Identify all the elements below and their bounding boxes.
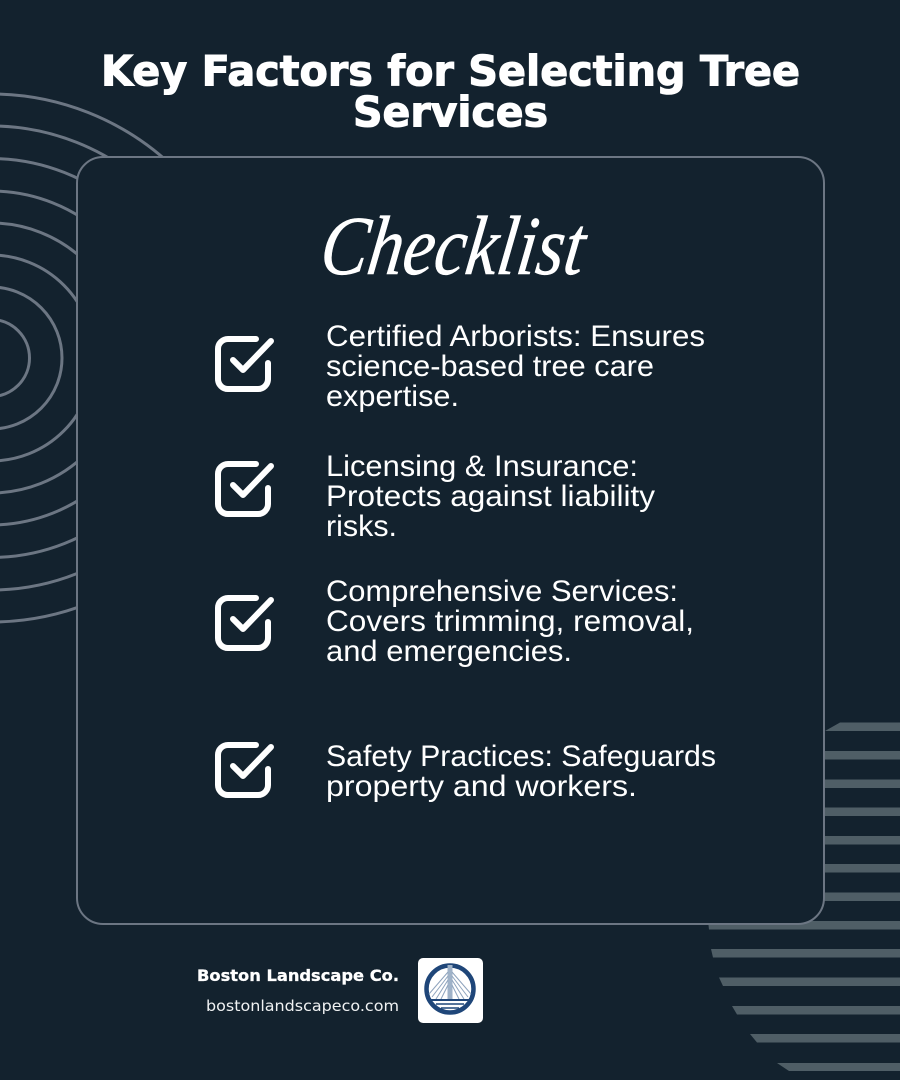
title xyxy=(101,46,800,136)
text: safety practices: property and workers. xyxy=(326,770,637,803)
text: certified arborists: expertise. xyxy=(326,380,459,413)
icon: checkbox xyxy=(218,745,271,795)
text: licensing and insurance: risks. xyxy=(326,510,397,543)
footer: company name and url xyxy=(197,966,399,1015)
panel: checklist xyxy=(77,157,824,924)
decorative concentric arcs xyxy=(0,94,255,622)
footer: company name and url: bostonlandscapeco.com xyxy=(206,997,399,1015)
text: certified arborists xyxy=(326,320,705,413)
decorative striped semicircle xyxy=(708,722,900,1071)
text: comprehensive services: Covers trimming, removal, xyxy=(326,605,694,638)
text: comprehensive services: Comprehensive Services: xyxy=(326,575,678,608)
heading: Checklist: Checklist xyxy=(315,200,593,293)
text: safety practices: Safety Practices: Safeguards xyxy=(326,740,716,773)
icon: company logo xyxy=(418,958,483,1023)
checklist item: safety practices xyxy=(218,740,716,803)
icon: checkbox xyxy=(218,464,271,514)
icon: checkbox xyxy=(218,339,271,389)
text: certified arborists: science-based tree care xyxy=(326,350,654,383)
footer: company name and url: Boston Landscape Co. xyxy=(197,966,399,985)
title: Key Factors for Selecting Tree xyxy=(101,46,800,96)
text: safety practices xyxy=(326,740,716,803)
icon: checkbox xyxy=(218,598,271,648)
checklist item: licensing and insurance xyxy=(218,450,655,543)
checklist item: certified arborists xyxy=(218,320,705,413)
text: certified arborists: Certified Arborists: Ensures xyxy=(326,320,705,353)
text: licensing and insurance: Licensing & Insurance: xyxy=(326,450,638,483)
text: licensing and insurance: Protects against liability xyxy=(326,480,655,513)
text: comprehensive services xyxy=(326,575,694,668)
title: Services xyxy=(353,88,548,136)
text: licensing and insurance xyxy=(326,450,655,543)
text: comprehensive services: and emergencies. xyxy=(326,635,572,668)
checklist item: comprehensive services xyxy=(218,575,694,668)
